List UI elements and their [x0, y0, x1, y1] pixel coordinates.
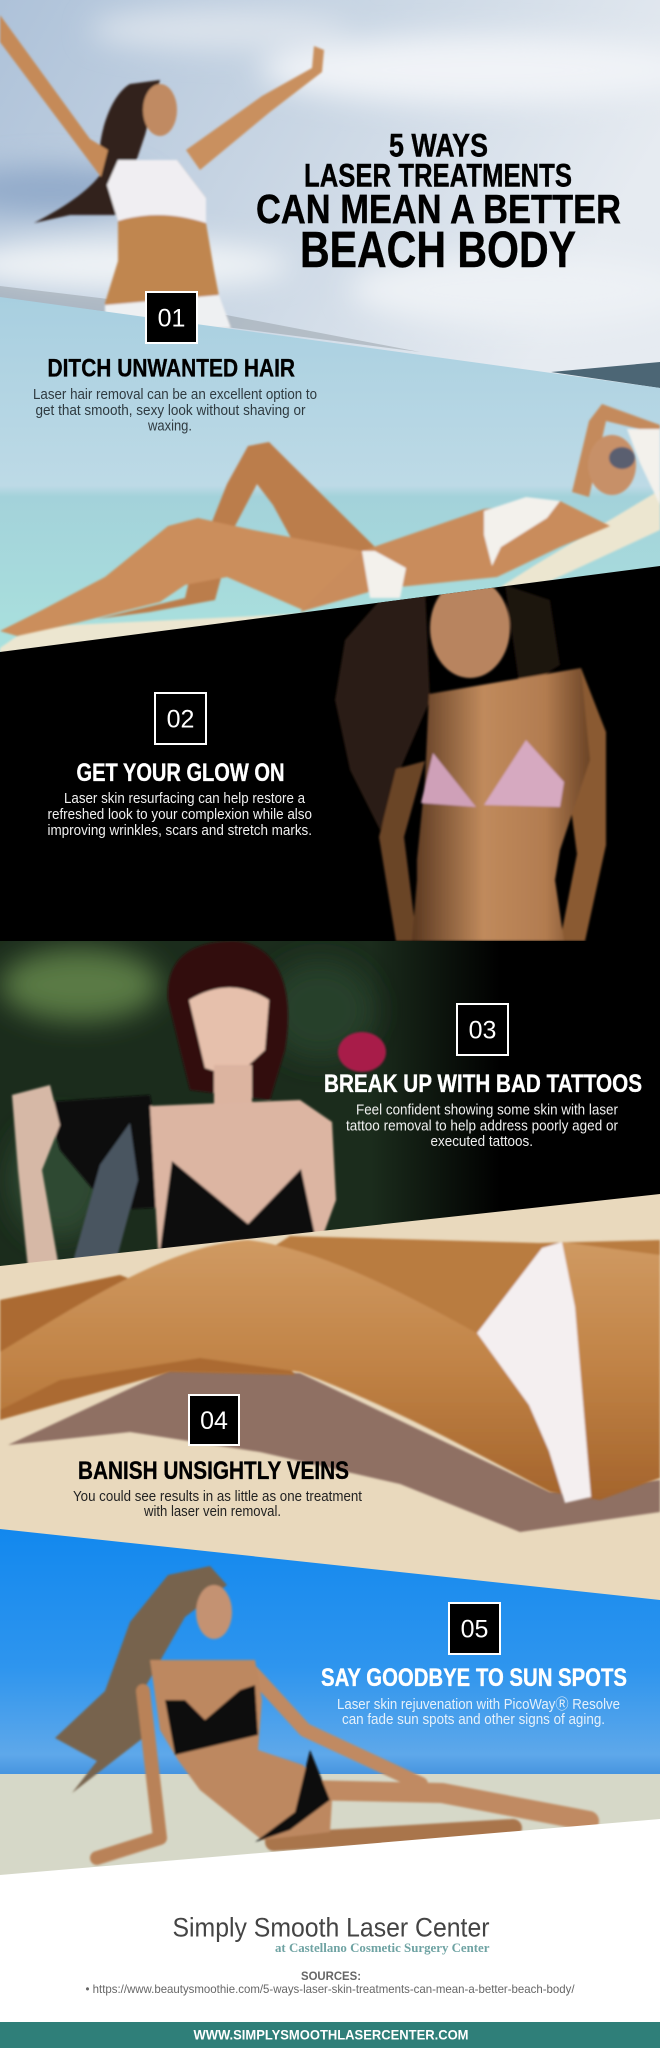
panel: section 1 sea background: [0, 297, 660, 660]
panel: section 2 black background: [0, 566, 660, 941]
icon: number badge 05: [449, 1603, 500, 1654]
body text 02: improving wrinkles, scars and stretch marks.: [48, 823, 312, 839]
icon: flowers: [338, 1032, 386, 1072]
body text 04: with laser vein removal.: [143, 1504, 281, 1520]
icon: sun lounger: [0, 490, 660, 660]
body text 03: [346, 1102, 618, 1150]
panel: section 3 garden photo: [0, 941, 660, 1271]
body text 02: Laser skin resurfacing can help restore a: [64, 791, 306, 807]
text block: step 02: [48, 693, 312, 839]
body text 05: can fade sun spots and other signs of aging.: [342, 1712, 605, 1728]
body text 02: [48, 791, 312, 839]
panel: hero sky photo: [0, 0, 660, 400]
text block: step 01: [33, 292, 317, 434]
icon: number badge 02: 02: [167, 706, 194, 734]
icon: number badge 03: 03: [469, 1016, 496, 1044]
icon: standing figure: [335, 578, 606, 941]
panel: white footer background: [0, 1819, 660, 2048]
body text 01: waxing.: [147, 418, 192, 434]
body text 01: Laser hair removal can be an excellent option to: [33, 387, 317, 403]
body text 05: Laser skin rejuvenation with PicoWayⓇ Resolve: [337, 1696, 620, 1713]
body text 04: You could see results in as little as one treatment: [73, 1489, 362, 1505]
icon: portrait figure: [12, 941, 336, 1268]
heading: get your glow on: GET YOUR GLOW ON: [76, 759, 284, 787]
text block: step 04: [73, 1395, 362, 1520]
heading: ditch unwanted hair: DITCH UNWANTED HAIR: [48, 354, 295, 382]
body text 03: Feel confident showing some skin with laser: [356, 1102, 618, 1118]
icon: number badge 01: 01: [158, 304, 185, 332]
title: 5 WAYS: [389, 128, 488, 164]
body text 02: refreshed look to your complexion while also: [48, 807, 312, 823]
logo: at Castellano Cosmetic Surgery Center: [275, 1941, 490, 1955]
icon: number badge 04: 04: [200, 1407, 228, 1435]
title: LASER TREATMENTS: [304, 158, 572, 194]
footer bar: WWW.SIMPLYSMOOTHLASERCENTER.COM: [194, 2026, 468, 2042]
text block: step 05: [321, 1603, 627, 1728]
heading: banish unsightly veins: BANISH UNSIGHTLY VEINS: [78, 1457, 349, 1485]
body text 03: tattoo removal to help address poorly aged or: [346, 1118, 618, 1134]
logo: [172, 1912, 490, 1955]
icon: hero figure: [0, 15, 324, 330]
body text 05: [337, 1696, 620, 1728]
text block: step 03: [324, 1004, 642, 1150]
logo: Simply Smooth Laser Center: [172, 1912, 490, 1942]
sources: [86, 1969, 575, 1996]
body text 03: executed tattoos.: [430, 1134, 533, 1150]
icon: shadow on sand: [8, 1370, 660, 1532]
sources: • https://www.beautysmoothie.com/5-ways-laser-skin-treatments-can-mean-a-better-beach-body/: [86, 1982, 575, 1996]
panel: section 4 sand photo: [0, 1194, 660, 1604]
title: [256, 128, 621, 278]
icon: number badge 03: [457, 1004, 508, 1055]
body text 04: [73, 1489, 362, 1520]
title: BEACH BODY: [300, 221, 576, 278]
body text 01: get that smooth, sexy look without shaving or: [36, 403, 306, 419]
icon: number badge 04: [189, 1395, 239, 1445]
panel: section 5 beach photo: [0, 1529, 660, 1878]
icon: number badge 01: [146, 292, 197, 343]
footer bar: [0, 2022, 660, 2048]
icon: legs: [0, 1236, 660, 1503]
icon: number badge 02: [155, 693, 206, 744]
body text 01: [33, 387, 317, 434]
sources: SOURCES:: [301, 1969, 361, 1983]
icon: reclining figure: [0, 404, 660, 636]
icon: number badge 05: 05: [461, 1616, 488, 1644]
icon: seated figure: [55, 1566, 589, 1858]
